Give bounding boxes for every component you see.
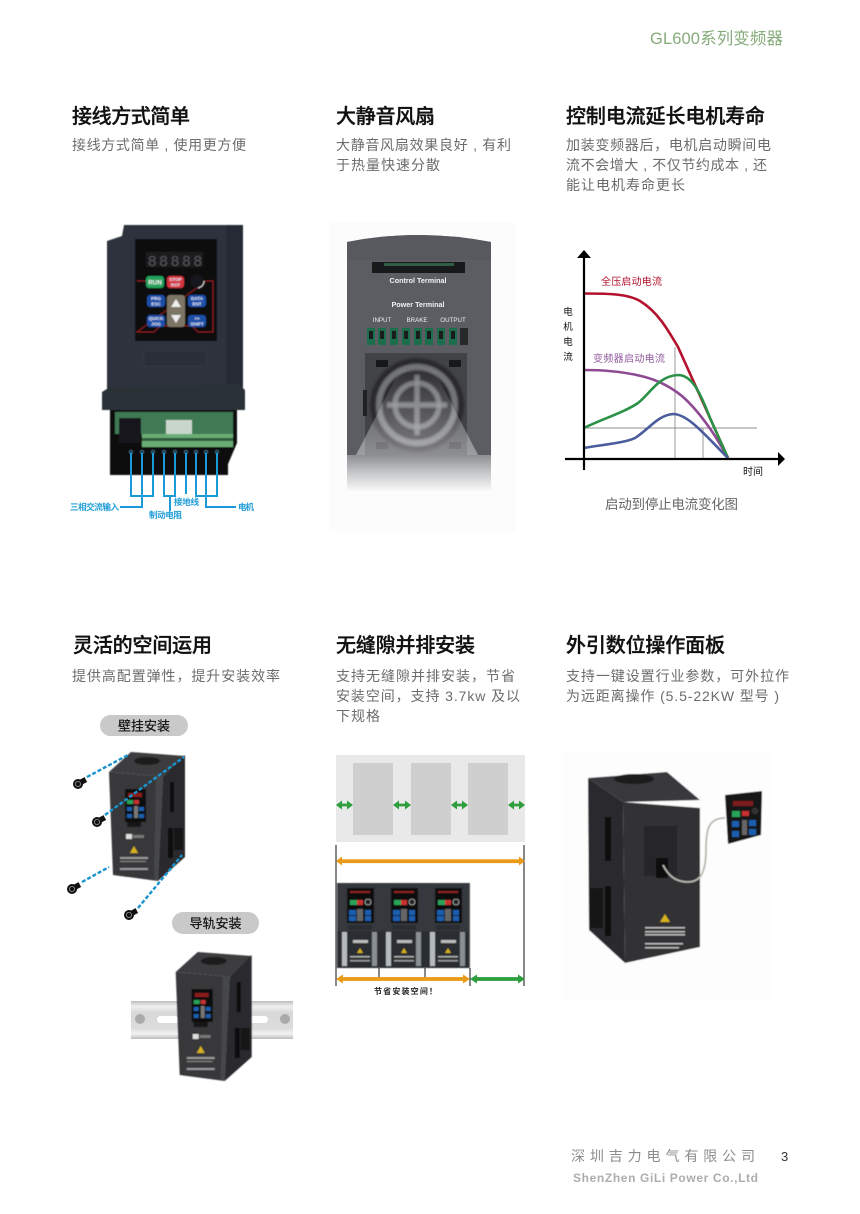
text: quiet fan description [336,137,511,173]
image: inverter fan view: Control Terminal [390,276,446,285]
image: three inverters side by side [337,883,470,968]
text: keypad description: 支持一键设置行业参数，可外拉作 [566,668,789,684]
image: inverter with wiring terminals: RUN [148,280,162,286]
image: inverter fan view: BRAKE [407,317,427,324]
arrow: x axis head [778,452,785,466]
image: inverter with wiring terminals: PRG [151,296,161,301]
diagram: wiring callouts [70,450,254,520]
heading: flexible mounting: 灵活的空间运用 [73,634,212,657]
text: motor life description: 流不会增大 , 不仅节约成本 , 还 [566,157,767,173]
curve: full voltage start current [584,294,728,458]
image: inverter fan view [329,222,516,531]
diagram: wiring callouts: 接地线 [174,497,199,507]
label: full voltage: 全压启动电流 [601,275,662,288]
panel: simple wiring [70,105,254,520]
arrow: compact width [336,974,470,984]
image: inverter fan view: OUTPUT [440,317,466,324]
panel: flexible mounting [67,634,293,1081]
x axis label: 时间 [743,465,763,478]
curve: inverter start current [584,370,728,458]
text: quiet fan description: 于热量快速分散 [336,157,440,173]
y axis label: 流 [563,351,573,363]
image: din rail [131,1001,293,1039]
text: keypad description [566,668,789,704]
panel: external keypad [562,634,789,1000]
panel: quiet fan [329,105,516,531]
text: keypad description: 为远距离操作 (5.5-22KW 型号 ) [566,688,779,704]
curve: blue motor current [584,414,728,458]
text: motor life description [566,137,771,193]
arrow: space saved [470,974,525,984]
text: motor life description: 能让电机寿命更长 [566,177,685,193]
y axis label [563,306,573,363]
image: inverter with remote keypad [562,752,770,1000]
arrow: full width [336,856,525,866]
line chart: start-to-stop current [563,250,785,478]
footer: english company name: ShenZhen GiLi Power Co.,Ltd [573,1171,758,1185]
text: quiet fan description: 大静音风扇效果良好 , 有利 [336,137,511,153]
image: inverter fan view: Power Terminal [392,300,444,309]
dimension lines [336,845,524,986]
pill: wall mount: 壁挂安装 [118,718,170,734]
text: seamless description [336,668,520,724]
footer: company name: 深圳吉力电气有限公司 [571,1148,755,1164]
image: inverter with wiring terminals: DATA [191,296,204,301]
image: inverter with wiring terminals: ENT [192,302,202,306]
image: inverter fan view: INPUT [373,317,392,324]
image: inverter with wiring terminals: JOG [151,322,161,326]
text: seamless description: 下规格 [336,708,380,724]
heading: motor life: 控制电流延长电机寿命 [566,104,765,128]
arrow: y axis head [577,250,591,258]
image: inverter with wiring terminals: RST [171,282,180,288]
diagram: wiring callouts: 电机 [238,502,254,512]
y axis label: 电 [563,336,573,348]
panel: side by side install [336,634,525,996]
wall mounting screws and guide lines [67,755,184,920]
text: seamless description: 支持无缝隙并排安装，节省 [336,668,515,684]
image: inverter with wiring terminals: >> [194,316,200,321]
image: inverter with wiring terminals: ESC [151,302,161,306]
image: wall mounted inverter [109,752,185,881]
pill: rail mount: 导轨安装 [190,916,242,931]
heading: wiring: 接线方式简单 [72,105,190,128]
image: inverter with wiring terminals: STOP [169,277,182,282]
image: inverter with wiring terminals: 88888 [148,253,202,270]
panel: motor current [563,104,785,512]
heading: quiet fan: 大静音风扇 [336,105,435,128]
label: inverter: 变频器启动电流 [593,352,665,365]
chart caption: 启动到停止电流变化图 [605,496,738,512]
image: inverter with wiring terminals [102,225,245,475]
label: space saved: 节省安装空间！ [374,986,437,996]
diagram: conventional spacing [336,755,525,842]
axes [565,257,779,470]
y axis label: 电 [563,306,573,318]
diagram: wiring callouts: 三相交流输入 [70,502,119,512]
heading: external keypad: 外引数位操作面板 [566,634,725,657]
text: mounting description: 提供高配置弹性，提升安装效率 [72,668,280,684]
heading: seamless install: 无缝隙并排安装 [336,634,475,657]
footer: page number: 3 [781,1149,788,1164]
image: rail mounted inverter [176,952,252,1081]
curve: green motor current [584,375,728,458]
header: series name: GL600系列变频器 [650,29,784,48]
text: wiring description: 接线方式简单 , 使用更方便 [72,137,246,153]
text: seamless description: 安装空间，支持 3.7kw 及以 [336,688,520,704]
diagram: wiring callouts: 制动电阻 [149,510,182,520]
pill: rail mount [172,912,259,934]
image: inverter with wiring terminals: SHIFT [190,322,204,326]
image: inverter with wiring terminals: QUICK [149,316,164,321]
pill: wall mount [100,715,188,736]
text: motor life description: 加装变频器后，电机启动瞬间电 [566,137,771,153]
y axis label: 机 [563,321,573,333]
